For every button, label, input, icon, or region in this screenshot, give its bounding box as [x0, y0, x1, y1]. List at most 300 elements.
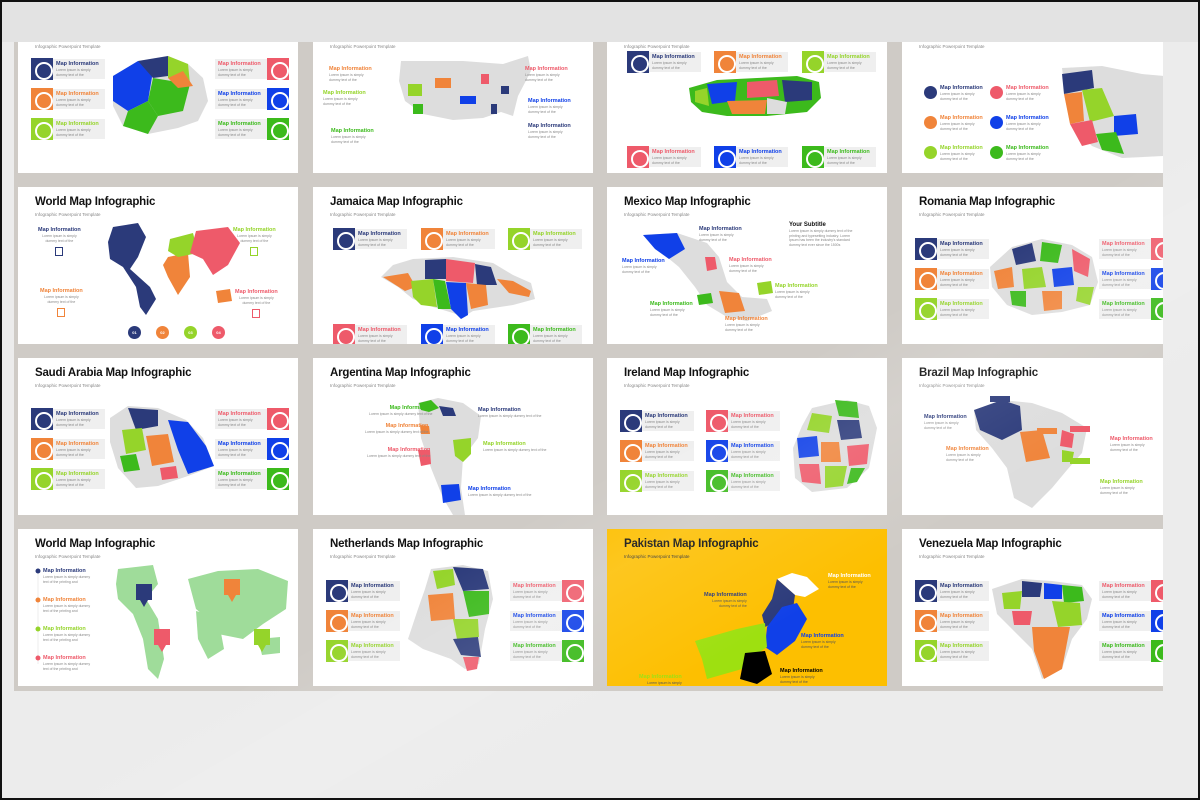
- slide: Saudi Arabia: Map Information: [218, 471, 261, 477]
- slide: Ireland: dummy text of the: [645, 454, 673, 458]
- slide: World Map: Map Information: [233, 227, 276, 233]
- labels: Lorem ipsum is simply dummy: [43, 575, 90, 579]
- slide: World Map: Infographic Powerpoint Template: [35, 212, 100, 217]
- slide: Jamaica: Map Information: [446, 327, 489, 333]
- slide: Turkey (top row, cut): Lorem ipsum is simply: [827, 156, 862, 160]
- slide: World Map 2: Lorem ipsum is simply dummy: [43, 633, 90, 637]
- icon labels: [924, 86, 937, 99]
- boxes left: [31, 408, 105, 430]
- slide: Venezuela: dummy text of the: [940, 624, 968, 628]
- slide: Poland (top row, cut): dummy text of the: [940, 126, 968, 130]
- slide: Venezuela: Lorem ipsum is simply: [1102, 650, 1137, 654]
- slide: Brazil: Infographic Powerpoint Template: [919, 383, 984, 388]
- slide: Venezuela: Infographic Powerpoint Template: [919, 554, 984, 559]
- slide: Saudi Arabia: Map Information: [56, 441, 99, 447]
- slide: Romania: Romania Map Infographic: [919, 196, 1055, 208]
- slide: Argentina: Infographic Powerpoint Template: [330, 383, 395, 388]
- slide: Pakistan (yellow): Map Information: [704, 592, 747, 598]
- slide: USA (top row, cut): [313, 16, 593, 173]
- slide: Turkey (top row, cut): dummy text of the: [739, 160, 767, 164]
- boxes top: dummy text of the: [358, 242, 386, 246]
- boxes bottom: Map Information: [358, 327, 401, 333]
- subtitle block: Ipsum has been the industry's standard: [789, 238, 850, 242]
- slide: Poland (top row, cut): dummy text of the: [940, 96, 968, 100]
- slide: Mexico: Map Information: [725, 316, 768, 322]
- map: [408, 565, 493, 671]
- slide: Romania: Lorem ipsum is simply: [1102, 308, 1137, 312]
- slide: Jamaica: dummy text of the: [533, 338, 561, 342]
- slide: Saudi Arabia: dummy text of the: [56, 452, 84, 456]
- slide: Pakistan (yellow): Map Information: [780, 668, 823, 674]
- slide: Mexico: Map Information: [775, 283, 818, 289]
- map: [399, 56, 531, 120]
- slide: Netherlands: dummy text of the: [513, 624, 541, 628]
- slide: World Map: Lorem ipsum is simply: [44, 295, 79, 299]
- slide: Saudi Arabia: Lorem ipsum is simply: [218, 448, 253, 452]
- labels: Map Information: [828, 573, 871, 579]
- slide: africa region (top row, cut): Map Information: [56, 121, 99, 127]
- slide: Pakistan (yellow): dummy text of the: [719, 604, 747, 608]
- info boxes left: Lorem ipsum is simply: [56, 68, 91, 72]
- slide: africa region (top row, cut): dummy text of the: [56, 102, 84, 106]
- boxes right: Lorem ipsum is simply: [1102, 248, 1137, 252]
- slide: Brazil: dummy text of the: [1110, 448, 1138, 452]
- slide: Venezuela: Map Information: [1102, 643, 1145, 649]
- slide: Mexico: Map Information: [650, 301, 693, 307]
- info boxes right: Map Information: [218, 61, 261, 67]
- slide: Ireland: Lorem ipsum is simply: [645, 450, 680, 454]
- labels: [828, 573, 871, 589]
- boxes right: dummy text of the: [1102, 594, 1130, 598]
- slide: World Map: dummy text of the: [47, 300, 75, 304]
- labels: Map Information: [43, 568, 86, 574]
- slide: USA (top row, cut): Lorem ipsum is simply: [331, 135, 366, 139]
- boxes right: Map Information: [1102, 241, 1145, 247]
- slide: Turkey (top row, cut): Lorem ipsum is simply: [739, 61, 774, 65]
- slide: Argentina: Map Information: [483, 441, 526, 447]
- slide: Mexico: dummy text of the: [775, 294, 803, 298]
- slide: Jamaica: Map Information: [446, 231, 489, 237]
- slide: africa region (top row, cut): dummy text of the: [218, 102, 246, 106]
- slide: Poland (top row, cut): Map Information: [940, 145, 983, 151]
- boxes bottom: Lorem ipsum is simply: [358, 334, 393, 338]
- slide: World Map: 02: [160, 330, 165, 335]
- slide: USA (top row, cut): dummy text of the: [331, 140, 359, 144]
- slide: Pakistan (yellow): Lorem ipsum is simply: [647, 681, 682, 685]
- labels: Lorem ipsum is simply: [699, 233, 734, 237]
- slide: Venezuela: dummy text of the: [940, 654, 968, 658]
- slide: africa region (top row, cut): Lorem ipsum is simply: [218, 128, 253, 132]
- slide: Venezuela: [902, 529, 1182, 686]
- slide: Mexico: Map Information: [729, 257, 772, 263]
- slide: Romania: dummy text of the: [940, 282, 968, 286]
- map: [643, 233, 773, 321]
- slide: Ireland: dummy text of the: [731, 484, 759, 488]
- slide: Ireland: Lorem ipsum is simply: [731, 480, 766, 484]
- subtitle block: Your Subtitle: [789, 222, 826, 228]
- subtitle block: [789, 222, 852, 247]
- slide: World Map 2: Map Information: [43, 597, 86, 603]
- slide: Poland (top row, cut): Lorem ipsum is simply: [1006, 122, 1041, 126]
- slide: USA (top row, cut): Map Information: [331, 128, 374, 134]
- slide: Jamaica: dummy text of the: [533, 242, 561, 246]
- labels: Map Information: [924, 414, 967, 420]
- numbered circles: [128, 326, 141, 339]
- labels: [329, 66, 372, 82]
- map: [418, 398, 481, 515]
- slide: World Map 2: Lorem ipsum is simply dummy: [43, 604, 90, 608]
- slide: Romania: dummy text of the: [1102, 312, 1130, 316]
- slide: USA (top row, cut): Lorem ipsum is simply: [528, 130, 563, 134]
- slide: Mexico: Mexico Map Infographic: [624, 196, 751, 208]
- slide: Argentina: Lorem ipsum is simply dummy text of the: [478, 414, 541, 418]
- labels: text of the printing and: [43, 580, 78, 584]
- slide: Netherlands: Infographic Powerpoint Template: [330, 554, 395, 559]
- slide: World Map 2: [18, 529, 298, 686]
- numbered circles: 01: [132, 330, 137, 335]
- slide: Turkey (top row, cut): dummy text of the: [827, 66, 855, 70]
- boxes top: dummy text of the: [652, 66, 680, 70]
- slide: Mexico: dummy text of the: [622, 270, 650, 274]
- slide: Poland (top row, cut): Map Information: [1006, 85, 1049, 91]
- slide: Saudi Arabia: Lorem ipsum is simply: [218, 478, 253, 482]
- slide: Poland (top row, cut): Lorem ipsum is simply: [1006, 152, 1041, 156]
- slide: Argentina: Lorem ipsum is simply dummy text of the: [365, 430, 428, 434]
- boxes col 1: Lorem ipsum is simply: [645, 420, 680, 424]
- map: [113, 56, 208, 134]
- slide: Romania: Lorem ipsum is simply: [940, 308, 975, 312]
- boxes left: Map Information: [56, 411, 99, 417]
- slide: Netherlands: Lorem ipsum is simply: [351, 620, 386, 624]
- slide: World Map: dummy text of the: [240, 238, 268, 242]
- boxes right: Lorem ipsum is simply: [513, 590, 548, 594]
- slide: Jamaica: Jamaica Map Infographic: [330, 196, 463, 208]
- slide: Brazil: dummy text of the: [946, 458, 974, 462]
- slide: Turkey (top row, cut): Map Information: [827, 149, 870, 155]
- subtitle block: printing and typesetting industry. Lorem: [789, 234, 850, 238]
- slide: Pakistan (yellow): Pakistan Map Infographic: [624, 538, 759, 550]
- map: [695, 573, 819, 684]
- boxes right: [215, 408, 289, 430]
- boxes left: Map Information: [351, 583, 394, 589]
- slide: Mexico: Lorem ipsum is simply: [622, 265, 657, 269]
- boxes left: [915, 580, 989, 602]
- slide: Mexico: Infographic Powerpoint Template: [624, 212, 689, 217]
- slide: Romania: Infographic Powerpoint Template: [919, 212, 984, 217]
- boxes bottom: dummy text of the: [358, 338, 386, 342]
- slide: Romania: Map Information: [1102, 271, 1145, 277]
- slide: Ireland: Map Information: [645, 473, 688, 479]
- slide: Poland (top row, cut): Map Information: [1006, 115, 1049, 121]
- slide: Netherlands: Lorem ipsum is simply: [513, 620, 548, 624]
- slide: africa region (top row, cut): Lorem ipsum is simply: [218, 98, 253, 102]
- slide: Romania: dummy text of the: [1102, 282, 1130, 286]
- slide: Romania: Map Information: [1102, 301, 1145, 307]
- map: [108, 223, 240, 315]
- slide: Jamaica: Lorem ipsum is simply: [446, 238, 481, 242]
- slide: Turkey (top row, cut): dummy text of the: [827, 160, 855, 164]
- slide: Mexico: dummy text of the: [729, 268, 757, 272]
- slide: Romania: [902, 187, 1182, 344]
- slide: Pakistan (yellow): dummy text of the: [801, 644, 829, 648]
- slide: Venezuela: dummy text of the: [1102, 654, 1130, 658]
- slide: Saudi Arabia: dummy text of the: [218, 482, 246, 486]
- slide: Pakistan (yellow): dummy text of the: [780, 680, 808, 684]
- slide: Pakistan (yellow): Map Information: [639, 674, 682, 680]
- slide: Saudi Arabia: dummy text of the: [218, 452, 246, 456]
- slide: World Map 2: text of the printing and: [43, 638, 78, 642]
- slide: Ireland: Map Information: [645, 443, 688, 449]
- boxes right: Map Information: [1102, 583, 1145, 589]
- boxes right: Map Information: [218, 411, 261, 417]
- slide: USA (top row, cut): Infographic Powerpoint Template: [330, 44, 395, 49]
- slide: Venezuela: Map Information: [1102, 613, 1145, 619]
- boxes bottom: [627, 146, 701, 168]
- slide: Poland (top row, cut): Lorem ipsum is simply: [940, 122, 975, 126]
- slide: africa region (top row, cut): Map Information: [218, 121, 261, 127]
- slide: Venezuela: Map Information: [940, 643, 983, 649]
- slide: Poland (top row, cut): Lorem ipsum is simply: [940, 152, 975, 156]
- slide: Pakistan (yellow): Map Information: [801, 633, 844, 639]
- slide: Ireland: dummy text of the: [731, 454, 759, 458]
- slide: USA (top row, cut): Lorem ipsum is simply: [528, 105, 563, 109]
- boxes right: dummy text of the: [1102, 252, 1130, 256]
- boxes left: Lorem ipsum is simply: [940, 248, 975, 252]
- slide: Saudi Arabia: Lorem ipsum is simply: [56, 478, 91, 482]
- slide: Ireland: Map Information: [731, 473, 774, 479]
- slide: Pakistan (yellow): [607, 529, 887, 686]
- slide: Mexico: Lorem ipsum is simply: [725, 323, 760, 327]
- map: [381, 257, 535, 319]
- slide: Turkey (top row, cut): Map Information: [739, 54, 782, 60]
- slide: Brazil: Brazil Map Infographic: [919, 367, 1038, 379]
- labels: Map Information: [38, 227, 81, 233]
- slide: Jamaica: Map Information: [533, 231, 576, 237]
- boxes left: Map Information: [940, 583, 983, 589]
- slide: Venezuela: Lorem ipsum is simply: [940, 620, 975, 624]
- boxes top: Lorem ipsum is simply: [358, 238, 393, 242]
- slide: World Map: 03: [188, 330, 193, 335]
- slide: africa region (top row, cut): dummy text of the: [56, 132, 84, 136]
- slide: africa region (top row, cut): Lorem ipsum is simply: [56, 128, 91, 132]
- slide: Romania: Lorem ipsum is simply: [1102, 278, 1137, 282]
- slide: Mexico: [607, 187, 887, 344]
- slide: Venezuela: Lorem ipsum is simply: [1102, 620, 1137, 624]
- slide: World Map 2: text of the printing and: [43, 608, 78, 612]
- slide: Saudi Arabia: Saudi Arabia Map Infographic: [35, 367, 191, 379]
- labels: dummy text of the: [45, 238, 73, 242]
- info boxes right: dummy text of the: [218, 72, 246, 76]
- slide: Mexico: Lorem ipsum is simply: [729, 264, 764, 268]
- labels: [369, 405, 432, 416]
- labels: dummy text of the: [699, 238, 727, 242]
- slide: Jamaica: Lorem ipsum is simply: [446, 334, 481, 338]
- slide: Brazil: Map Information: [1100, 479, 1143, 485]
- slide: Mexico: dummy text of the: [725, 328, 753, 332]
- slide: USA (top row, cut): Lorem ipsum is simply: [525, 73, 560, 77]
- boxes left: dummy text of the: [940, 252, 968, 256]
- slide: Turkey (top row, cut): [607, 16, 887, 173]
- slide: Ireland: Map Information: [731, 443, 774, 449]
- slide: Pakistan (yellow): Infographic Powerpoint Template: [624, 554, 689, 559]
- slide: Venezuela: Map Information: [940, 613, 983, 619]
- map: [110, 406, 214, 488]
- boxes top: [333, 228, 407, 250]
- slide: Poland (top row, cut): dummy text of the: [1006, 96, 1034, 100]
- boxes bottom: Lorem ipsum is simply: [652, 156, 687, 160]
- slide: Saudi Arabia: Map Information: [218, 441, 261, 447]
- slide: Argentina: [313, 358, 593, 515]
- boxes left: Lorem ipsum is simply: [56, 418, 91, 422]
- boxes top: Map Information: [358, 231, 401, 237]
- slide: Saudi Arabia: Infographic Powerpoint Template: [35, 383, 100, 388]
- slide: Saudi Arabia: Map Information: [56, 471, 99, 477]
- slide: Turkey (top row, cut): Lorem ipsum is simply: [739, 156, 774, 160]
- info boxes right: [215, 58, 289, 80]
- boxes left: Map Information: [940, 241, 983, 247]
- boxes top: Lorem ipsum is simply: [652, 61, 687, 65]
- slide: Poland (top row, cut): Infographic Powerpoint Template: [919, 44, 984, 49]
- slide: Argentina: Lorem ipsum is simply dummy text of the: [483, 448, 546, 452]
- slide: Netherlands: dummy text of the: [351, 624, 379, 628]
- boxes col 1: [620, 410, 694, 432]
- slide: Venezuela: Venezuela Map Infographic: [919, 538, 1062, 550]
- slide: africa region (top row, cut): Lorem ipsum is simply: [56, 98, 91, 102]
- boxes right: [510, 580, 584, 602]
- slide: World Map: World Map Infographic: [35, 196, 155, 208]
- boxes right: [1099, 580, 1163, 602]
- slide: Netherlands: Lorem ipsum is simply: [513, 650, 548, 654]
- slide: Turkey (top row, cut): Map Information: [827, 54, 870, 60]
- slide: Romania: Map Information: [940, 271, 983, 277]
- labels: Map Information: [699, 226, 742, 232]
- slide: Mexico: Lorem ipsum is simply: [650, 308, 685, 312]
- slide: Jamaica: [313, 187, 593, 344]
- labels: dummy text of the: [329, 78, 357, 82]
- slide: World Map: 04: [216, 330, 221, 335]
- slide: Venezuela: dummy text of the: [1102, 624, 1130, 628]
- boxes right: dummy text of the: [513, 594, 541, 598]
- map: [974, 396, 1090, 508]
- boxes right: [1099, 238, 1163, 260]
- labels: Lorem ipsum is simply: [924, 421, 959, 425]
- info boxes left: dummy text of the: [56, 72, 84, 76]
- info boxes right: Lorem ipsum is simply: [218, 68, 253, 72]
- slide: Brazil: [902, 358, 1182, 515]
- map: [992, 579, 1092, 679]
- slide: Mexico: Map Information: [622, 258, 665, 264]
- slide: africa region (top row, cut): Infographic Powerpoint Template: [35, 44, 100, 49]
- slide: africa region (top row, cut): Map Information: [218, 91, 261, 97]
- slide: Jamaica: Lorem ipsum is simply: [533, 238, 568, 242]
- labels: Lorem ipsum is simply: [329, 73, 364, 77]
- boxes bottom: Map Information: [652, 149, 695, 155]
- map: [689, 76, 821, 116]
- boxes left: [326, 580, 400, 602]
- boxes right: Lorem ipsum is simply: [218, 418, 253, 422]
- slide: Turkey (top row, cut): Infographic Powerpoint Template: [624, 44, 689, 49]
- slide: Netherlands: Map Information: [351, 613, 394, 619]
- boxes col 1: Map Information: [645, 413, 688, 419]
- slide: Poland (top row, cut): dummy text of the: [1006, 156, 1034, 160]
- boxes col 1: dummy text of the: [645, 424, 673, 428]
- slide: Ireland: dummy text of the: [645, 484, 673, 488]
- slide: Poland (top row, cut): [902, 16, 1182, 173]
- slide: Poland (top row, cut): Lorem ipsum is simply: [940, 92, 975, 96]
- boxes left: dummy text of the: [56, 422, 84, 426]
- boxes top: [627, 51, 701, 73]
- slide: Romania: Map Information: [940, 301, 983, 307]
- slide: Jamaica: Map Information: [533, 327, 576, 333]
- slide: Jamaica: dummy text of the: [446, 338, 474, 342]
- slide: Brazil: dummy text of the: [1100, 490, 1128, 494]
- slide: Venezuela: Lorem ipsum is simply: [940, 650, 975, 654]
- slide: Brazil: Lorem ipsum is simply: [1100, 486, 1135, 490]
- slide: Turkey (top row, cut): Map Information: [739, 149, 782, 155]
- slide: World Map: Lorem ipsum is simply: [239, 296, 274, 300]
- slide: Netherlands: Map Information: [513, 613, 556, 619]
- slide: Netherlands: dummy text of the: [513, 654, 541, 658]
- slides grid frame: [14, 42, 1163, 691]
- subtitle block: Lorem ipsum is simply dummy text of the: [789, 229, 852, 233]
- slide: World Map 2: Map Information: [43, 655, 86, 661]
- boxes col 2: Lorem ipsum is simply: [731, 420, 766, 424]
- slide: Saudi Arabia: Lorem ipsum is simply: [56, 448, 91, 452]
- slide: World Map 2: text of the printing and: [43, 666, 78, 670]
- slide: Pakistan (yellow): Lorem ipsum is simply: [712, 599, 747, 603]
- slide: Pakistan (yellow): Lorem ipsum is simply: [801, 640, 836, 644]
- boxes right: Map Information: [513, 583, 556, 589]
- slide: Argentina: Map Information: [386, 423, 428, 429]
- slide: Poland (top row, cut): dummy text of the: [940, 156, 968, 160]
- boxes left: dummy text of the: [351, 594, 379, 598]
- slide: Argentina: Map Information: [388, 447, 430, 453]
- slide: Argentina: Map Information: [468, 486, 511, 492]
- slide: Argentina: Argentina Map Infographic: [330, 367, 471, 379]
- slide: Pakistan (yellow): Lorem ipsum is simply: [780, 675, 815, 679]
- boxes right: Lorem ipsum is simply: [1102, 590, 1137, 594]
- slide: Poland (top row, cut): dummy text of the: [1006, 126, 1034, 130]
- slide: Netherlands: dummy text of the: [351, 654, 379, 658]
- slide: africa region (top row, cut): dummy text of the: [218, 132, 246, 136]
- slide: Netherlands: [313, 529, 593, 686]
- slide: World Map: Map Information: [40, 288, 83, 294]
- subtitle block: dummy text ever since the 1500s: [789, 242, 840, 246]
- slide: Jamaica: Lorem ipsum is simply: [533, 334, 568, 338]
- labels: Map Information: [329, 66, 372, 72]
- slide: USA (top row, cut): dummy text of the: [528, 134, 556, 138]
- slide: Poland (top row, cut): Map Information: [940, 85, 983, 91]
- labels: dummy text of the: [924, 426, 952, 430]
- slide: Argentina: Map Information: [478, 407, 521, 413]
- info boxes left: [31, 58, 105, 80]
- slide: Ireland: Ireland Map Infographic: [624, 367, 749, 379]
- slide: Ireland: Lorem ipsum is simply: [645, 480, 680, 484]
- boxes bottom: [333, 324, 407, 344]
- slide: Netherlands: Map Information: [513, 643, 556, 649]
- slide: USA (top row, cut): dummy text of the: [323, 102, 351, 106]
- boxes col 2: [706, 410, 780, 432]
- slide: World Map: dummy text of the: [242, 300, 270, 304]
- slide: Ireland: Infographic Powerpoint Template: [624, 383, 689, 388]
- boxes col 2: dummy text of the: [731, 424, 759, 428]
- slide: Netherlands: Lorem ipsum is simply: [351, 650, 386, 654]
- labels: dummy text of the: [828, 584, 856, 588]
- slide: Poland (top row, cut): Map Information: [940, 115, 983, 121]
- map: [793, 400, 877, 492]
- labels: Lorem ipsum is simply: [828, 580, 863, 584]
- slide: Turkey (top row, cut): Lorem ipsum is simply: [827, 61, 862, 65]
